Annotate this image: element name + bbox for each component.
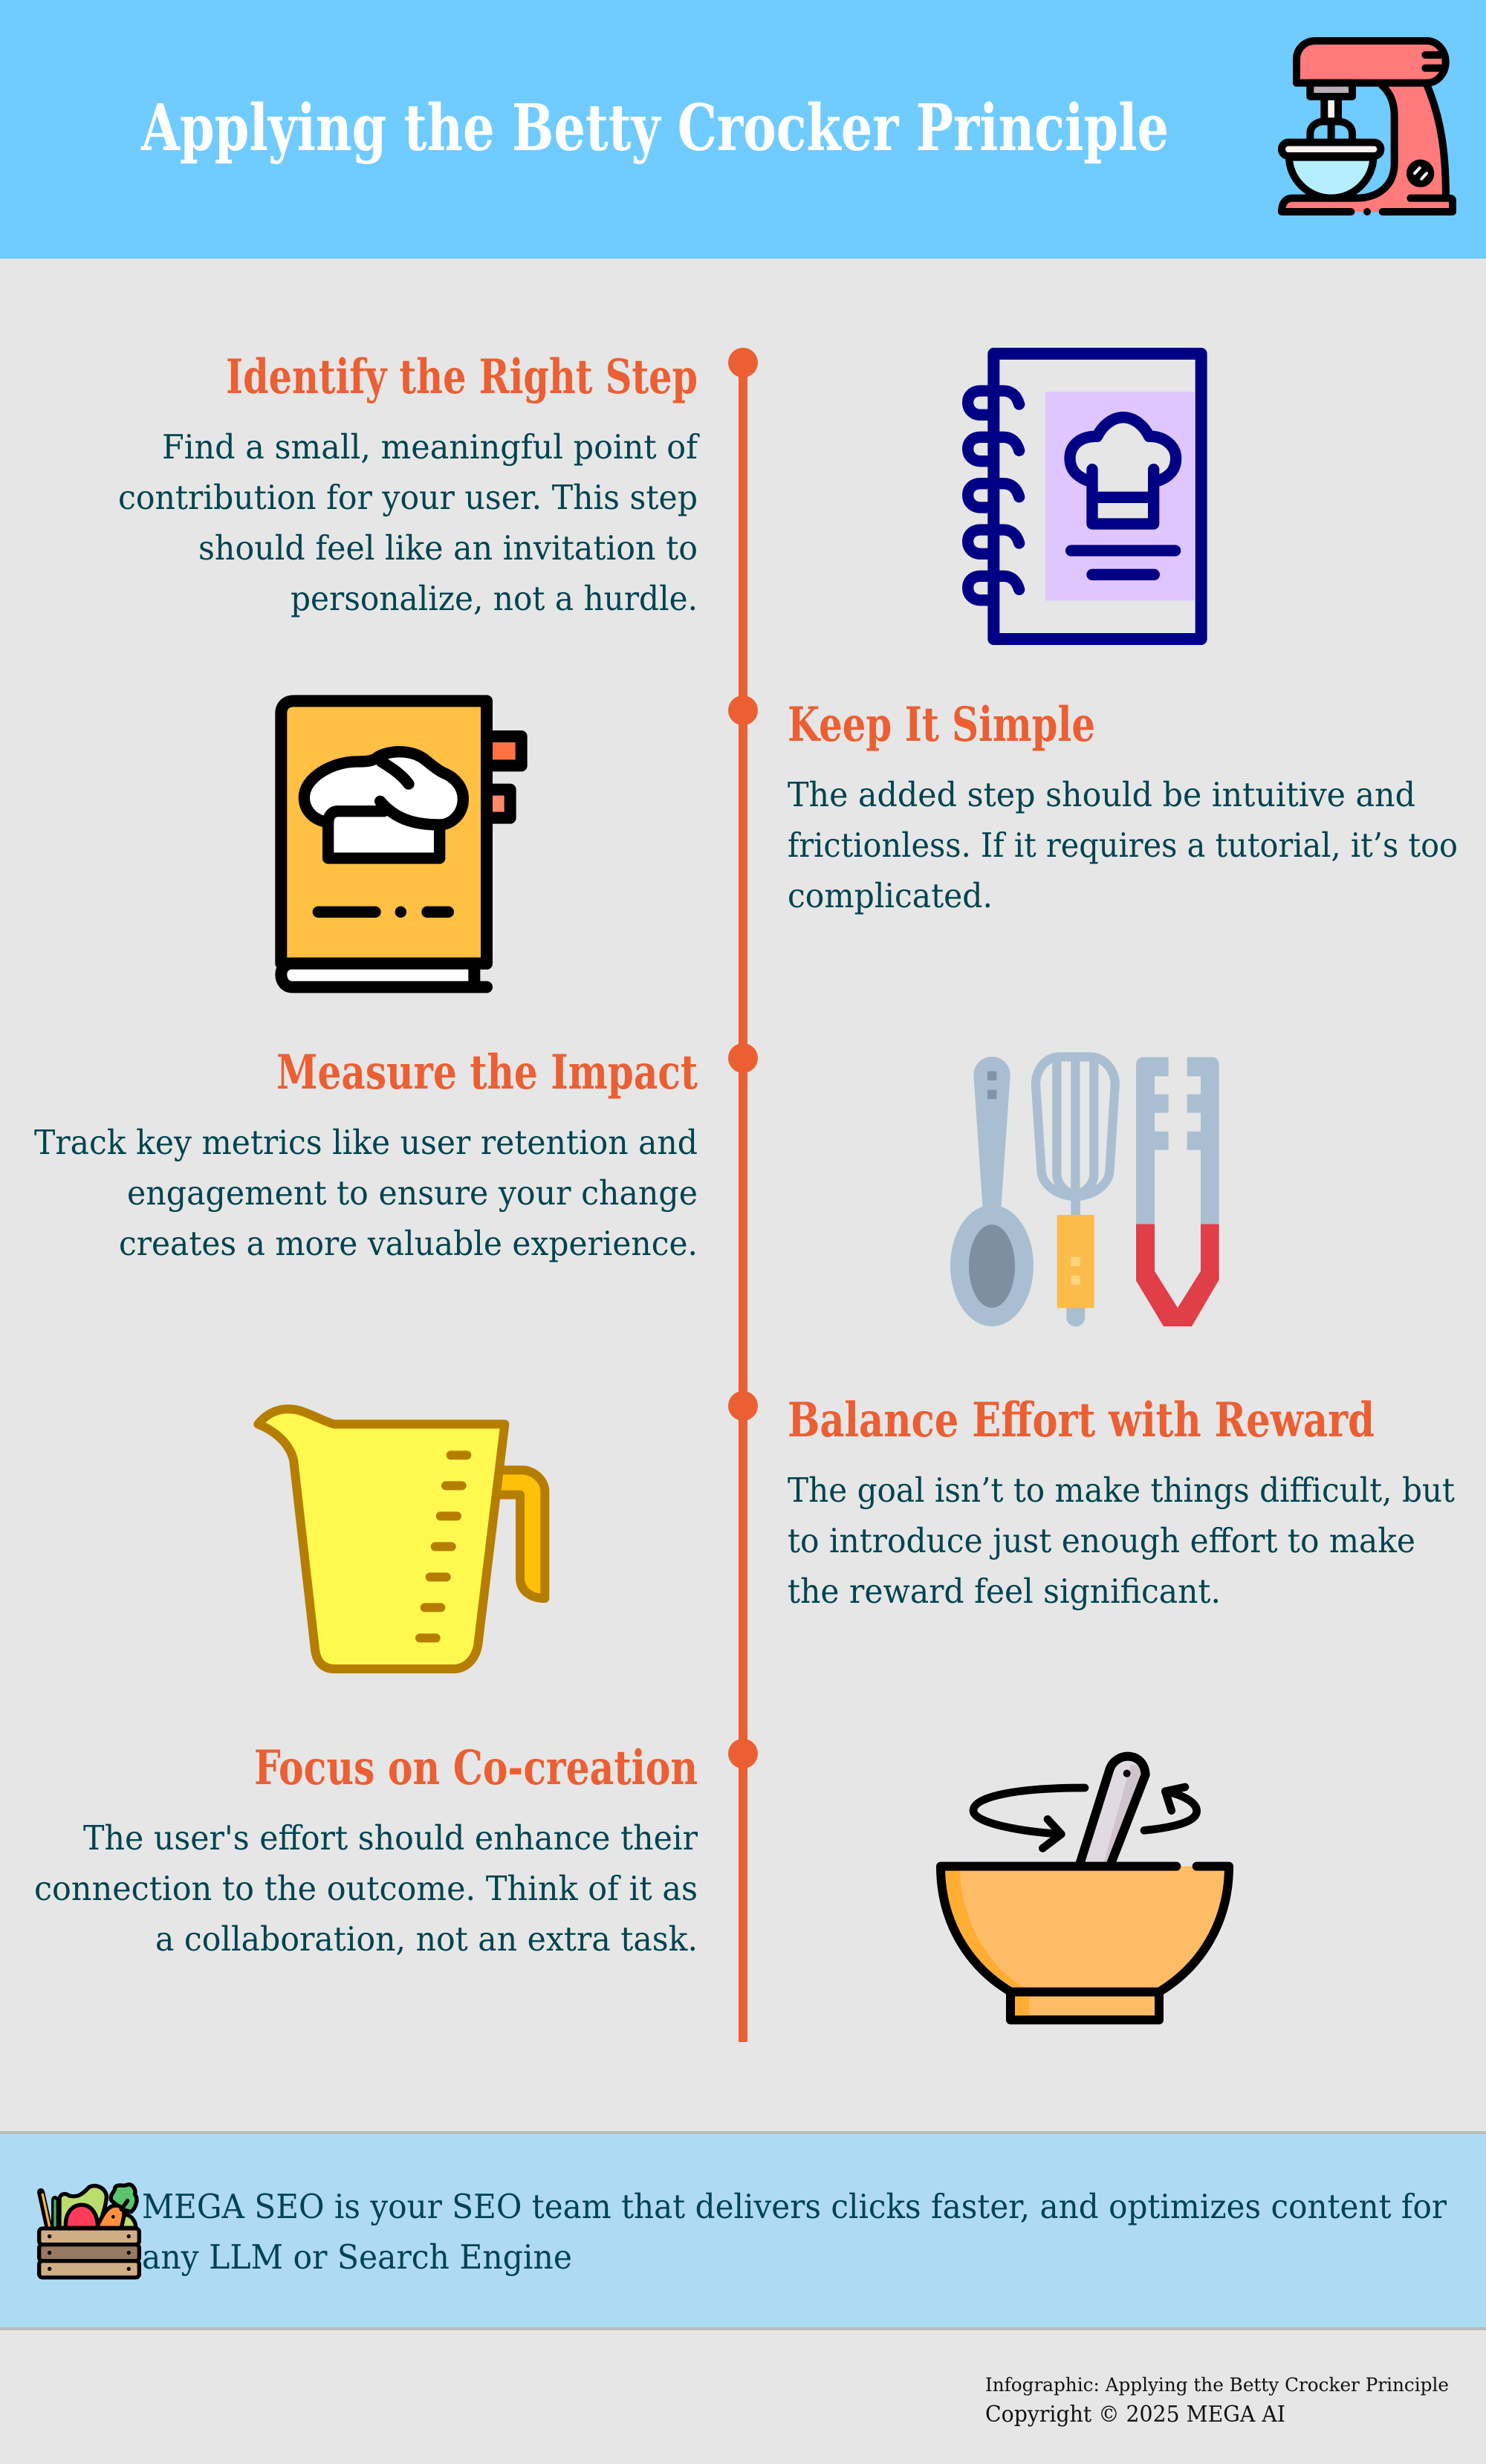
description: The goal isn’t to make things difficult, but [788,1471,1455,1510]
description: to introduce just enough effort to make [788,1521,1415,1560]
step 5: focus on co-creation [34,1740,698,1959]
header banner [0,0,1486,259]
icon: mixing bowl with spoon [941,1757,1229,2020]
promo text [142,2187,1447,2277]
footer credits: Copyright © 2025 MEGA AI [985,2402,1285,2428]
description [34,1123,698,1263]
description: engagement to ensure your change [127,1173,698,1213]
icon: stand mixer [1282,41,1453,215]
description: creates a more valuable experience. [119,1224,698,1263]
step 4: balance effort with reward [788,1393,1455,1611]
step 3: measure the impact [34,1045,698,1263]
footer credits [985,2374,1449,2428]
description: a collaboration, not an extra task. [155,1919,698,1959]
icon: spiral recipe notebook [968,354,1201,639]
promo band [0,2131,1486,2330]
icon: chef hat cookbook [281,701,522,987]
heading: Focus on Co-creation [254,1740,698,1796]
step 1: identify the right step [118,349,700,618]
footer credits: Infographic: Applying the Betty Crocker Principle [985,2374,1449,2396]
description: Track key metrics like user retention and [34,1123,698,1162]
description [34,1818,698,1959]
description [788,1471,1455,1611]
description: Find a small, meaningful point of [162,427,700,467]
timeline spine [728,348,758,2042]
description: connection to the outcome. Think of it as [34,1869,698,1908]
icon: measuring cup [258,1409,545,1669]
description: personalize, not a hurdle. [291,579,698,618]
description: should feel like an invitation to [198,528,698,568]
step 2: keep it simple [788,697,1458,915]
icon: vegetable crate [39,2185,139,2277]
description: contribution for your user. This step [118,478,698,517]
promo text: any LLM or Search Engine [142,2237,572,2277]
description: The user's effort should enhance their [83,1818,698,1858]
description: the reward feel significant. [788,1572,1221,1611]
description [118,427,700,618]
description: complicated. [788,876,993,915]
description: The added step should be intuitive and [788,775,1415,814]
heading: Keep It Simple [788,697,1095,753]
heading: Measure the Impact [276,1045,698,1100]
heading: Identify the Right Step [226,349,698,405]
description [788,775,1458,915]
icon: kitchen utensils [950,1057,1219,1326]
title: Applying the Betty Crocker Principle [140,91,1169,166]
